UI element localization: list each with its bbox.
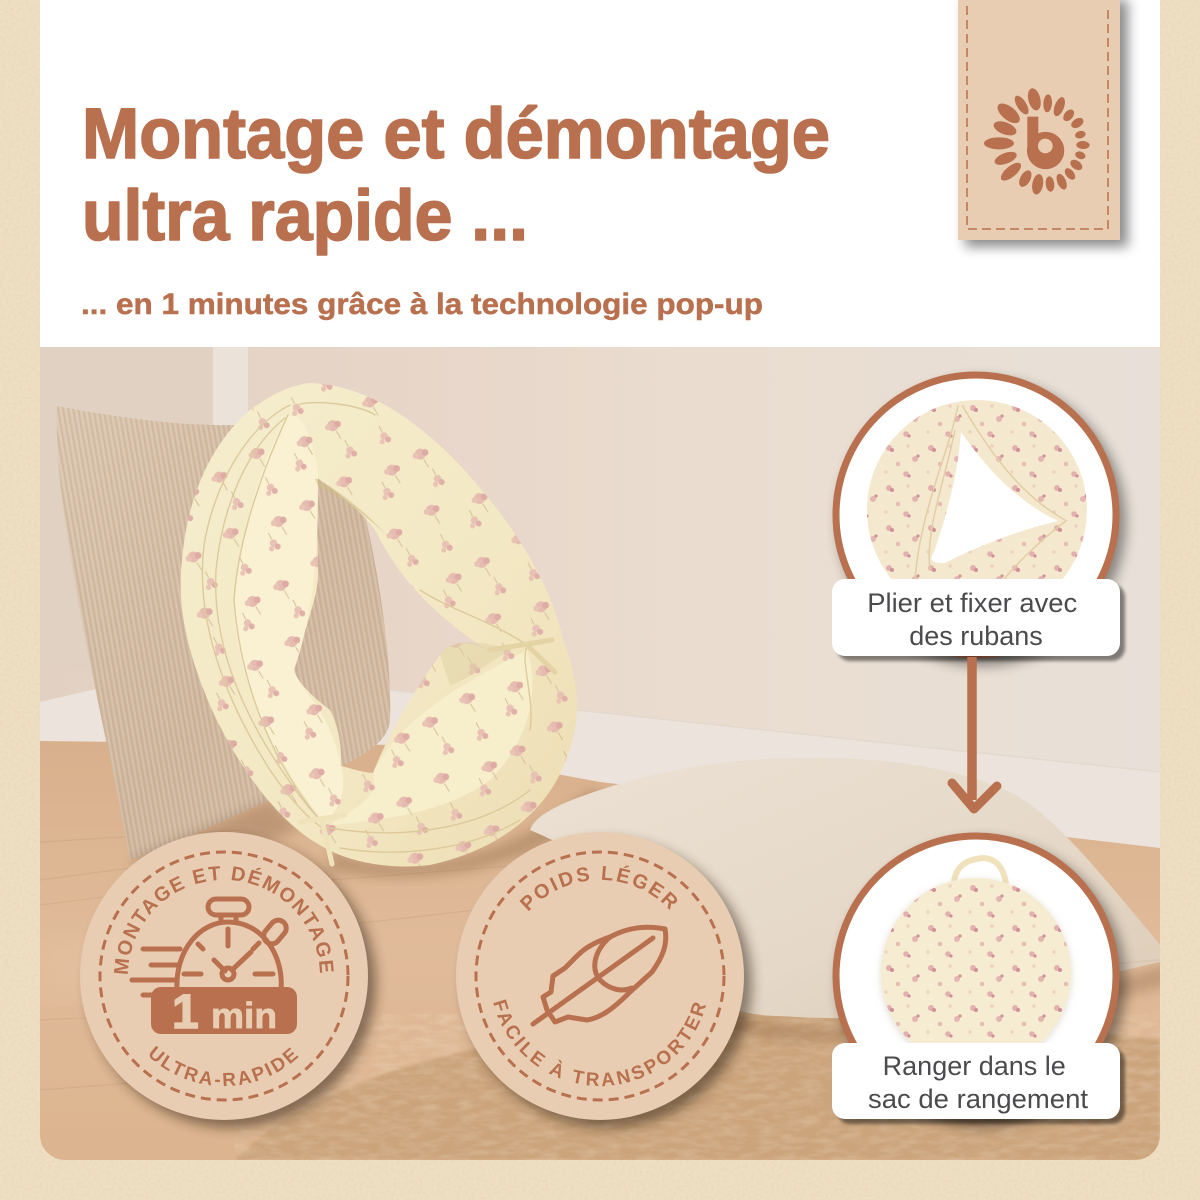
title bbox=[82, 95, 830, 256]
panel: white header bbox=[40, 0, 1160, 348]
ribbon ties bbox=[490, 640, 555, 672]
wall bbox=[40, 347, 1160, 772]
woven rug bbox=[235, 1014, 1160, 1160]
badge text: bottom arc: ULTRA-RAPIDE bbox=[150, 1046, 298, 1086]
front panel, left bbox=[234, 416, 343, 820]
step 2: caption bbox=[832, 1043, 1125, 1124]
subtitle: ... en 1 minutes grâce à la technologie pop-up bbox=[81, 288, 763, 321]
step 2: circle image bbox=[836, 836, 1126, 1127]
step 2: caption: Ranger dans le bbox=[883, 1051, 1066, 1081]
baseboard bbox=[40, 689, 1160, 784]
brand tag with logo bbox=[958, 0, 1128, 247]
badge: poids leger bbox=[456, 832, 760, 1136]
badge text: facile a transporter: FACILE À TRANSPORTER bbox=[493, 999, 706, 1086]
left knitted pillow bbox=[57, 406, 390, 880]
time banner bbox=[151, 986, 297, 1039]
step 1: caption: Plier et fixer avec bbox=[867, 588, 1077, 618]
time banner: min bbox=[211, 995, 277, 1036]
title: Montage et démontage bbox=[82, 95, 830, 174]
icon: storage bag bbox=[954, 858, 1006, 884]
floral pop-up tent folded in a ring bbox=[181, 383, 577, 866]
arrow: step 1 to step 2 bbox=[952, 657, 997, 809]
step 1: caption bbox=[832, 579, 1125, 661]
icon: feather bbox=[533, 927, 666, 1024]
badge: montage 1 minute bbox=[80, 832, 384, 1136]
step 1: circle image bbox=[836, 375, 1126, 666]
step 2: caption: sac de rangement bbox=[868, 1084, 1088, 1114]
panel: room photo bbox=[40, 347, 1170, 1160]
step 1: caption: des rubans bbox=[909, 621, 1043, 651]
icon: stopwatch bbox=[132, 899, 289, 995]
title: ultra rapide ... bbox=[82, 177, 528, 256]
right floor pillow bbox=[530, 758, 1170, 1040]
icon: sun logo b bbox=[984, 87, 1090, 195]
scarf shadow on floor bbox=[330, 790, 610, 877]
floor bbox=[40, 741, 1160, 1160]
front panel, right lower bbox=[330, 650, 532, 825]
time banner: 1 bbox=[172, 986, 199, 1039]
fabric folds bbox=[202, 403, 531, 852]
badge text: top arc: MONTAGE ET DÉMONTAGE bbox=[114, 866, 334, 974]
window frame bbox=[213, 347, 248, 426]
badge text: poids leger: POIDS LÉGER bbox=[520, 866, 678, 911]
